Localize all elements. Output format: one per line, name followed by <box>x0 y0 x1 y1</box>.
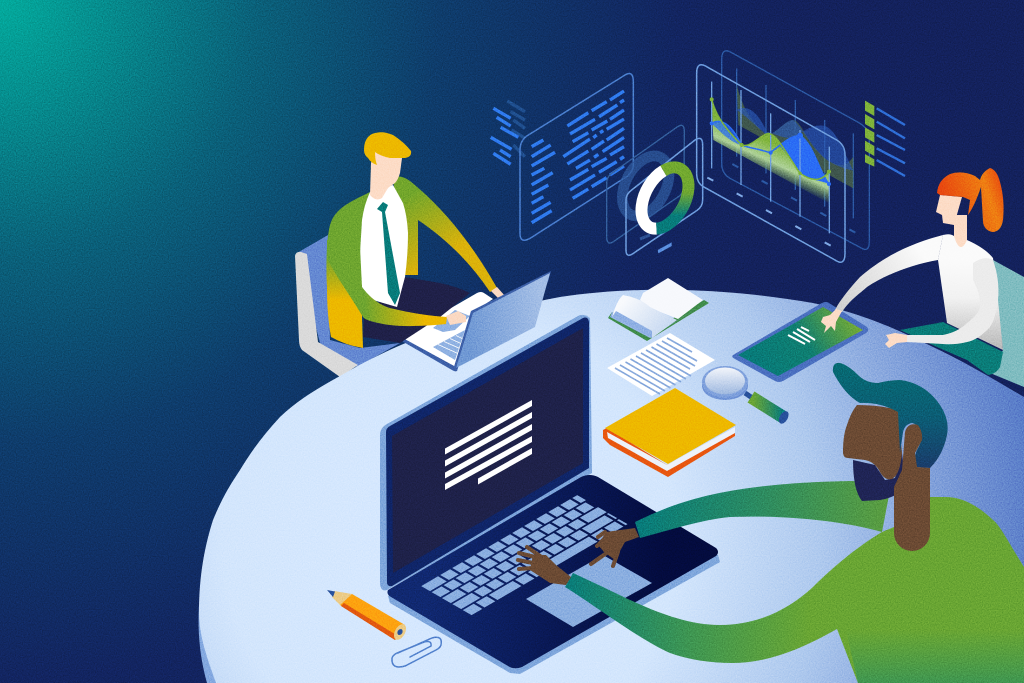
tie <box>377 202 400 305</box>
large laptop <box>380 315 720 674</box>
shirt <box>360 185 408 307</box>
jacket <box>326 192 370 348</box>
neck and ear <box>894 424 930 551</box>
man's chair <box>295 235 400 377</box>
beard <box>853 453 906 501</box>
upper arm <box>635 481 890 538</box>
keyboard keys <box>426 498 623 613</box>
donut chart <box>641 167 688 229</box>
right hand <box>591 528 639 566</box>
neck <box>954 215 967 252</box>
magnifying glass <box>702 366 791 425</box>
torso <box>938 234 1003 350</box>
text panel <box>520 73 633 240</box>
document page <box>607 333 715 396</box>
woman <box>821 168 1004 350</box>
other arm <box>907 258 998 344</box>
trousers <box>363 277 470 343</box>
pencil <box>327 590 409 642</box>
man with laptop <box>326 132 505 348</box>
base rim <box>388 482 720 674</box>
face <box>936 195 962 225</box>
tablet <box>732 302 868 382</box>
screen frame <box>386 318 589 586</box>
left hand <box>518 547 571 585</box>
yellow book <box>603 388 736 477</box>
keyboard deck <box>387 475 718 668</box>
back donut panel <box>607 125 684 243</box>
back line chart panel <box>722 51 869 249</box>
floating data dashboard <box>491 51 905 262</box>
torso and lower arm <box>565 497 1024 683</box>
woman's chair and skirt <box>900 260 1024 387</box>
open book <box>608 278 709 341</box>
face <box>843 405 902 479</box>
front donut panel <box>626 138 703 255</box>
screen text lines <box>445 400 532 490</box>
reaching arm <box>835 235 943 312</box>
screen display <box>392 328 583 573</box>
hair and ponytail <box>937 168 1004 232</box>
trackpad <box>526 555 652 627</box>
paperclip <box>392 637 441 667</box>
legend bars and lines <box>865 101 905 176</box>
front arm <box>327 240 447 326</box>
shirt shadow <box>846 630 1024 683</box>
hair <box>364 132 411 165</box>
small laptop screen <box>453 271 551 371</box>
screen rim <box>380 315 592 590</box>
table <box>199 290 1024 683</box>
head and neck <box>370 150 402 199</box>
small laptop base <box>400 292 500 371</box>
hands <box>446 287 505 325</box>
front line chart panel <box>697 65 845 262</box>
floating text lines left <box>491 101 525 164</box>
man with cap reaching for laptop <box>518 363 1024 683</box>
hand on tablet <box>821 309 842 333</box>
back arm <box>393 177 497 292</box>
resting hand <box>885 333 907 348</box>
cap and hair <box>833 363 948 468</box>
